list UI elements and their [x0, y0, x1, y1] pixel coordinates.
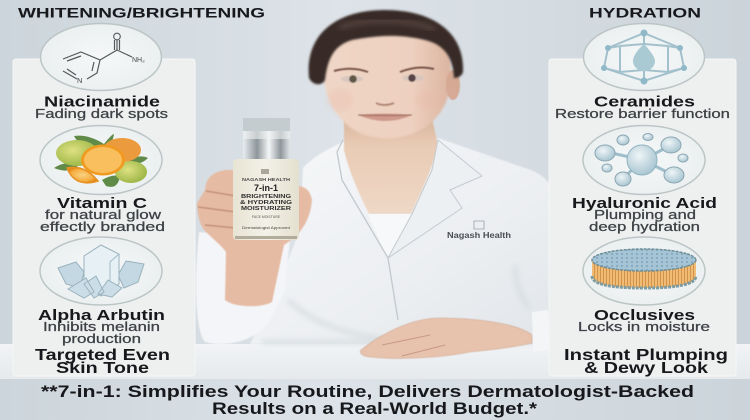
product bottle: MOISTURIZER — [241, 206, 291, 212]
heading: whitening: WHITENING/BRIGHTENING — [18, 4, 265, 20]
icon: ceramide cage — [584, 24, 704, 90]
cheeks — [327, 89, 441, 111]
label: Occlusives: Occlusives — [594, 307, 695, 324]
text: for natural glow: for natural glow — [45, 207, 162, 222]
label: Niacinamide: Niacinamide — [44, 94, 160, 110]
benefit: Instant Plumping & Dewy Look: Instant Plumping — [564, 347, 728, 364]
coat body — [250, 138, 552, 344]
benefit: Targeted Even Skin Tone: Targeted Even — [35, 347, 170, 364]
product bottle: FACE MOISTURE — [252, 214, 280, 219]
product bottle: Dermatologist Approved — [242, 225, 290, 230]
label: Alpha Arbutin: Alpha Arbutin — [38, 307, 165, 324]
brand on coat: Nagash Health — [447, 230, 511, 240]
hair highlight — [340, 21, 435, 30]
icon: citrus fruit — [40, 126, 162, 194]
lapel right — [388, 140, 482, 258]
hair — [309, 10, 463, 84]
benefit: Instant Plumping & Dewy Look — [564, 347, 728, 377]
icon: hyaluronic acid bubbles — [583, 126, 705, 194]
product bottle: NAGASH HEALTH — [242, 177, 291, 182]
ear — [446, 70, 460, 100]
product bottle: BRIGHTENING — [241, 194, 291, 200]
text: Restore barrier function: Restore barrier function — [555, 106, 730, 121]
resting hand — [360, 310, 549, 358]
heading: hydration: HYDRATION — [589, 4, 701, 20]
footer text: **7-in-1: Simplifies Your Routine, Delivers Dermatologist-Backed — [41, 382, 694, 401]
text: Locks in moisture: Locks in moisture — [578, 319, 710, 334]
panel: whitening backdrop — [13, 59, 195, 376]
footer text: Results on a Real-World Budget.* — [212, 399, 537, 418]
text: effectly branded: effectly branded — [40, 219, 165, 234]
neck — [344, 118, 438, 214]
panel: hydration backdrop — [549, 59, 736, 376]
text: Inhibits melanin: Inhibits melanin — [43, 319, 160, 334]
text: production: production — [62, 331, 141, 346]
text: deep hydration: deep hydration — [589, 219, 700, 234]
photo: woman in lab coat — [196, 10, 552, 358]
text: Plumping and: Plumping and — [594, 207, 696, 222]
coat shading — [262, 265, 545, 342]
nose and lips — [358, 103, 412, 121]
product bottle: & HYDRATING — [240, 200, 292, 206]
icon: niacinamide molecule: N — [77, 76, 82, 85]
lapel left — [337, 140, 398, 320]
label: Vitamin C: Vitamin C — [57, 195, 147, 212]
brand on coat — [447, 221, 511, 240]
icon: lipid bilayer — [583, 237, 705, 305]
product bottle — [233, 118, 299, 240]
icon: niacinamide molecule: NH₂ — [132, 57, 145, 64]
holding hand — [197, 170, 312, 306]
label: Hyaluronic Acid: Hyaluronic Acid — [572, 195, 717, 212]
eyebrows and eyes — [334, 68, 434, 83]
table — [0, 344, 750, 379]
face — [322, 28, 451, 138]
icon: niacinamide molecule — [40, 24, 162, 90]
product bottle: 7-in-1 — [254, 183, 278, 193]
coat sleeve left — [196, 232, 290, 344]
label: Ceramides: Ceramides — [594, 94, 695, 110]
footer text — [41, 382, 694, 418]
undershirt — [368, 214, 411, 260]
icon: crystals — [40, 237, 162, 305]
benefit: Targeted Even Skin Tone: Skin Tone — [56, 360, 149, 377]
benefit: Instant Plumping & Dewy Look: & Dewy Look — [584, 360, 708, 377]
text: Fading dark spots: Fading dark spots — [35, 106, 169, 121]
benefit: Targeted Even Skin Tone — [35, 347, 170, 377]
